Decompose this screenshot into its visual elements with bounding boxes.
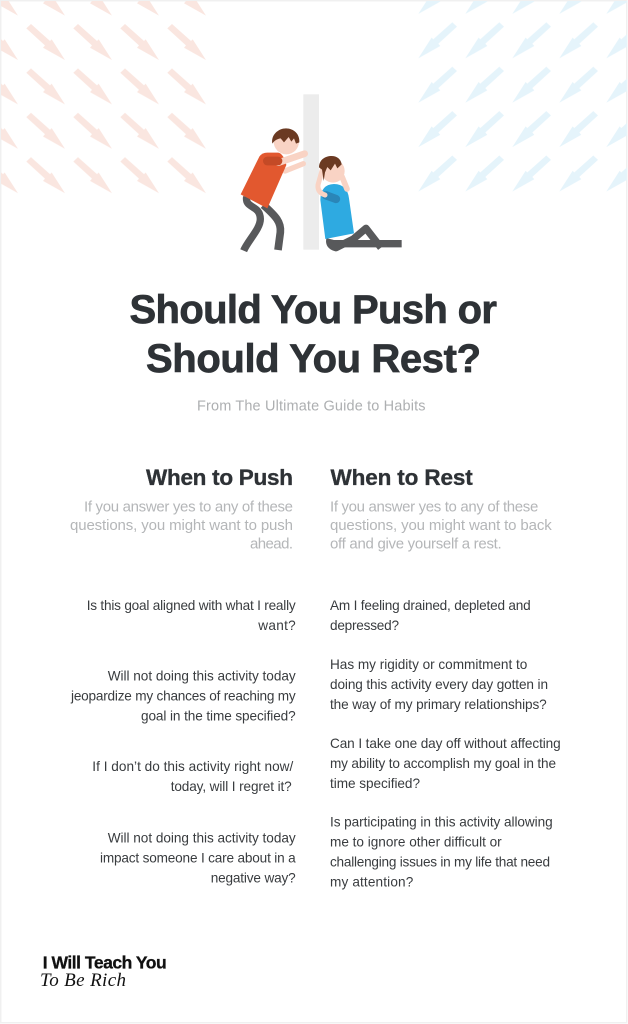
question: one day off: time specified?: [330, 776, 420, 791]
question: goal aligned: want?: [257, 618, 296, 633]
heading: when to push: When to Push: [146, 465, 293, 490]
intro text: push: If you answer yes to any of these: [84, 499, 293, 516]
question: impact someone: Will not doing this activity today: [108, 830, 296, 845]
question: regret: If I don’t do this activity right now/: [92, 759, 294, 774]
question: drained: [330, 598, 531, 633]
question: jeopardize chances: goal in the time specified?: [141, 709, 296, 724]
panel: when to rest: [330, 465, 561, 890]
question: rigidity: the way of my primary relationships?: [330, 697, 547, 712]
illustration: one person pushing a wall, one resting against it: [241, 94, 402, 251]
question: one day off: my ability to accomplish my goal in the: [330, 756, 556, 771]
question: ignoring issues: [330, 815, 553, 890]
intro text: rest: off and give yourself a rest.: [330, 535, 502, 552]
intro text: rest: [330, 499, 552, 552]
logo: I Will Teach You To Be Rich: [40, 952, 167, 991]
question: ignoring issues: challenging issues in my life that need: [330, 855, 550, 870]
question: jeopardize chances: jeopardize my chances of reaching my: [70, 689, 296, 704]
question: regret: [92, 759, 294, 794]
intro text: push: questions, you might want to push: [70, 517, 293, 534]
question: ignoring issues: Is participating in this activity allowing: [330, 815, 553, 830]
question: regret: today, will I regret it?: [171, 779, 292, 794]
pushing person: [241, 128, 305, 251]
subtitle: From The Ultimate Guide to Habits: [197, 399, 426, 415]
question: ignoring issues: my attention?: [330, 875, 414, 890]
intro text: rest: If you answer yes to any of these: [330, 499, 538, 516]
question: impact someone: negative way?: [211, 870, 296, 885]
question: jeopardize chances: [70, 669, 296, 724]
question: goal aligned: [87, 598, 296, 633]
question: drained: Am I feeling drained, depleted and: [330, 598, 531, 613]
panel: when to push: [70, 465, 296, 885]
wall: [303, 94, 319, 250]
blue arrow pattern pointing left: [415, 1, 627, 198]
intro text: push: [70, 499, 293, 552]
title: [130, 288, 497, 381]
resting person: [318, 156, 402, 248]
logo: I Will Teach You To Be Rich: To Be Rich: [40, 970, 126, 991]
red arrow pattern pointing right: [1, 1, 210, 198]
logo: I Will Teach You To Be Rich: I Will Teach You: [43, 952, 167, 972]
question: jeopardize chances: Will not doing this activity today: [108, 669, 296, 684]
question: rigidity: [330, 657, 548, 712]
intro text: push: ahead.: [250, 535, 293, 552]
intro text: rest: questions, you might want to back: [330, 517, 552, 534]
title: Should You Rest?: [146, 337, 481, 381]
title: Should You Push or: [130, 288, 497, 332]
question: goal aligned: Is this goal aligned with what I really: [87, 598, 296, 613]
heading: when to rest: When to Rest: [330, 465, 473, 490]
question: ignoring issues: me to ignore other difficult or: [330, 835, 502, 850]
question: one day off: [330, 736, 561, 791]
question: impact someone: impact someone I care about in a: [100, 850, 296, 865]
question: rigidity: Has my rigidity or commitment to: [330, 657, 527, 672]
question: drained: depressed?: [330, 618, 399, 633]
question: one day off: Can I take one day off without affecting: [330, 736, 561, 751]
question: impact someone: [100, 830, 296, 885]
question: rigidity: doing this activity every day gotten in: [330, 677, 548, 692]
